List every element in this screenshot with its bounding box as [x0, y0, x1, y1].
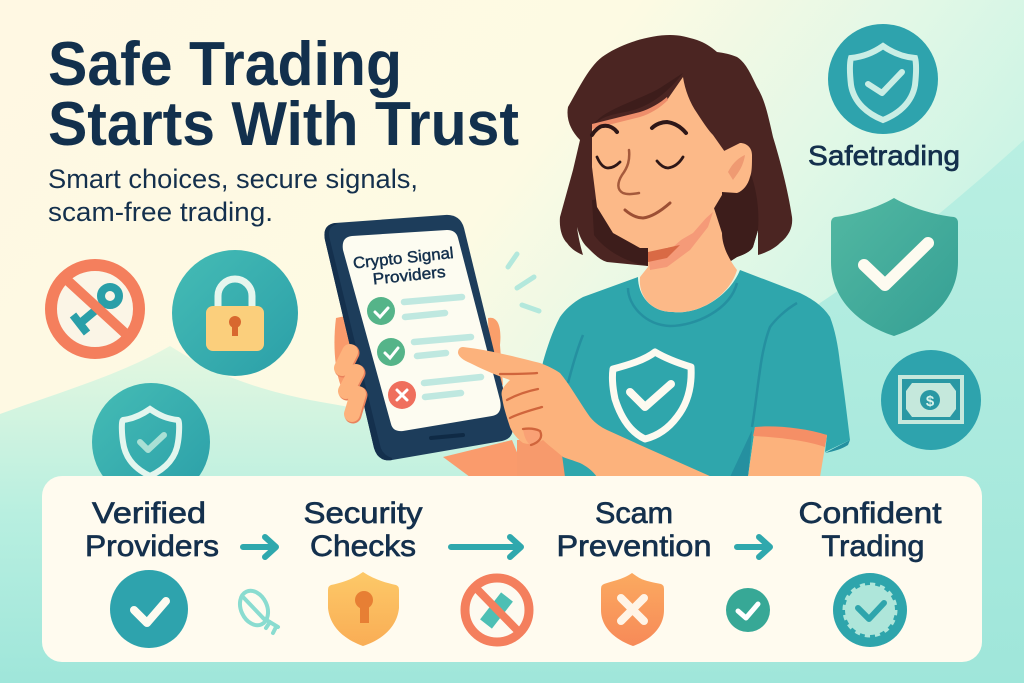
person	[520, 35, 850, 477]
icon: verified check	[110, 570, 188, 648]
shirt folds	[568, 283, 797, 427]
icon: money circle	[881, 350, 981, 450]
icon: badge check	[833, 573, 907, 647]
icon: money circle: $	[926, 393, 935, 410]
step labels: Security	[304, 497, 422, 530]
arrows	[243, 537, 770, 557]
icon: shield circle left	[92, 383, 210, 501]
signal marks	[508, 254, 539, 311]
step labels: Trading	[822, 530, 924, 563]
tablet heading: Crypto Signal	[352, 245, 454, 272]
icon: padlock	[172, 250, 298, 376]
pointing hand	[458, 347, 712, 477]
subtitle: scam-free trading.	[48, 197, 273, 227]
icon: no sign	[465, 578, 529, 642]
step labels	[85, 497, 942, 563]
step labels: Scam	[595, 497, 673, 530]
subtitle	[48, 164, 418, 227]
step labels: Verified	[92, 497, 206, 530]
label: Safetrading: Safetrading	[808, 140, 960, 171]
home button	[431, 435, 463, 438]
process panel	[42, 476, 982, 662]
icon: no key	[51, 265, 139, 353]
left hand behind tablet	[334, 315, 527, 477]
ear	[722, 143, 752, 193]
shirt shield	[612, 352, 691, 439]
tablet	[324, 215, 513, 460]
neck shadow	[648, 212, 713, 270]
title: Starts With Trust	[48, 90, 519, 159]
tablet screen	[343, 230, 501, 431]
list rows	[367, 297, 481, 409]
step labels: Providers	[85, 530, 219, 563]
shirt	[520, 270, 850, 477]
title: Safe Trading	[48, 30, 402, 99]
hair shadow	[592, 73, 758, 266]
icon: keyhole shield	[328, 572, 399, 646]
face	[592, 77, 725, 248]
icon: large green shield	[831, 198, 958, 336]
step labels: Checks	[310, 530, 416, 563]
right arm	[748, 427, 827, 477]
step labels: Prevention	[556, 530, 712, 563]
icon: shield check top right	[828, 24, 938, 134]
hair	[560, 35, 792, 266]
tablet heading	[352, 245, 456, 290]
sleeve shadow	[730, 430, 850, 477]
title	[48, 30, 519, 159]
neck	[640, 205, 737, 312]
step labels: Confident	[798, 497, 942, 530]
icon: cross shield	[601, 573, 664, 646]
icon: crossed key	[235, 586, 278, 633]
subtitle: Smart choices, secure signals,	[48, 164, 418, 194]
left hand fingers	[342, 352, 359, 415]
icon: small check	[726, 588, 770, 632]
tablet heading: Providers	[372, 264, 446, 288]
brows, eyes, nose, mouth	[592, 122, 686, 218]
